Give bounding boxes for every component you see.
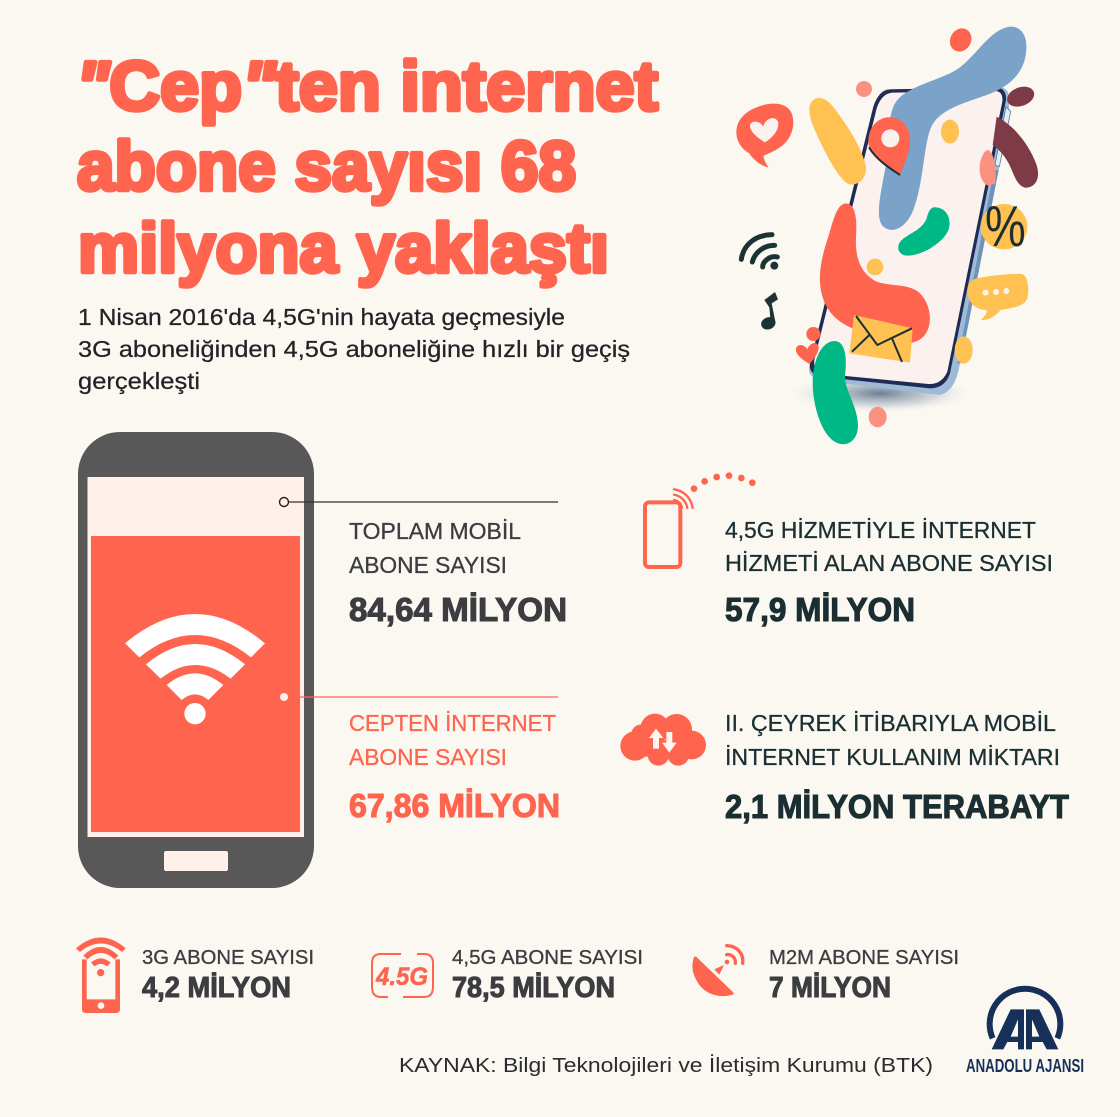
stat: M2M subscribers: M2M ABONE SAYISI bbox=[769, 947, 959, 969]
stat: 3G subscribers: 3G ABONE SAYISI bbox=[142, 947, 314, 969]
stat: total mobile subscribers: 84,64 MİLYON bbox=[349, 591, 567, 628]
stat: 4.5G internet subscribers: 4,5G HİZMETİYLE İNTERNET bbox=[725, 517, 1036, 543]
icon: cloud with arrows bbox=[620, 714, 706, 766]
stat: 4.5G subscribers: 78,5 MİLYON bbox=[452, 972, 615, 1004]
subtitle text block: 1 Nisan 2016'da 4,5G'nin hayata geçmesiyle bbox=[78, 304, 565, 330]
stat: 3G subscribers: 4,2 MİLYON bbox=[142, 972, 291, 1004]
icon: chat bubble with dots bbox=[967, 274, 1028, 320]
stat: mobile internet usage: II. ÇEYREK İTİBARIYLA MOBİL bbox=[725, 710, 1056, 736]
callout line: mobile internet subscribers bbox=[280, 693, 558, 701]
stat: total mobile subscribers: ABONE SAYISI bbox=[349, 552, 507, 578]
icon: 3G phone with wifi bbox=[76, 937, 126, 1013]
stat: total mobile subscribers: TOPLAM MOBİL bbox=[349, 518, 521, 544]
title: milyona yaklaştı bbox=[78, 209, 609, 287]
stat: mobile internet subscribers: CEPTEN İNTERNET bbox=[349, 710, 556, 736]
icon: satellite dish bbox=[694, 946, 743, 995]
stat: mobile internet usage: İNTERNET KULLANIM MİKTARI bbox=[725, 744, 1060, 770]
icon: location pin bbox=[868, 117, 910, 175]
stat: 4.5G subscribers bbox=[452, 947, 643, 1004]
stat: mobile internet usage: 2,1 MİLYON TERABAYT bbox=[725, 788, 1069, 825]
stat: mobile internet subscribers: 67,86 MİLYON bbox=[349, 787, 560, 824]
icon: 4.5G badge: 4.5G bbox=[375, 963, 428, 991]
title bbox=[76, 47, 658, 287]
icon: heart speech bubble bbox=[736, 104, 793, 168]
subtitle text block bbox=[78, 304, 630, 394]
icon: 4.5G badge bbox=[372, 954, 433, 997]
panel: large phone graphic bbox=[78, 432, 314, 888]
stat: 4.5G internet subscribers: 57,9 MİLYON bbox=[725, 591, 915, 628]
stat: 4.5G internet subscribers: HİZMETİ ALAN ABONE SAYISI bbox=[725, 550, 1053, 576]
stat: 4.5G subscribers: 4,5G ABONE SAYISI bbox=[452, 947, 643, 969]
stat: mobile internet subscribers: ABONE SAYISI bbox=[349, 744, 507, 770]
icon: envelope bbox=[849, 315, 913, 363]
subtitle text block: 3G aboneliğinden 4,5G aboneliğine hızlı bir geçiş bbox=[78, 336, 630, 362]
callout line: total subscribers bbox=[280, 498, 558, 506]
icon: wifi waves bbox=[741, 235, 778, 270]
icon: percent badge: % bbox=[985, 195, 1026, 259]
icon: wifi symbol on phone bbox=[125, 614, 265, 724]
icon: phone with signal bbox=[645, 472, 756, 567]
title: abone sayısı 68 bbox=[77, 127, 576, 205]
stat: M2M subscribers: 7 MİLYON bbox=[769, 972, 891, 1004]
stat: M2M subscribers bbox=[769, 947, 959, 1004]
stat: 4.5G internet subscribers bbox=[725, 517, 1053, 628]
stat: mobile internet subscribers bbox=[349, 710, 560, 824]
illustration: smartphone with colourful blobs bbox=[736, 24, 1038, 444]
stat: mobile internet usage bbox=[725, 710, 1069, 825]
logo: Anadolu Ajansı bbox=[966, 989, 1084, 1076]
source text: KAYNAK: Bilgi Teknolojileri ve İletişim Kurumu (BTK) bbox=[399, 1054, 933, 1077]
subtitle text block: gerçekleşti bbox=[78, 368, 200, 394]
title: "Cep"ten internet bbox=[76, 47, 658, 125]
icon: music note bbox=[759, 292, 778, 331]
stat: total mobile subscribers bbox=[349, 518, 567, 628]
stat: 3G subscribers bbox=[142, 947, 314, 1004]
